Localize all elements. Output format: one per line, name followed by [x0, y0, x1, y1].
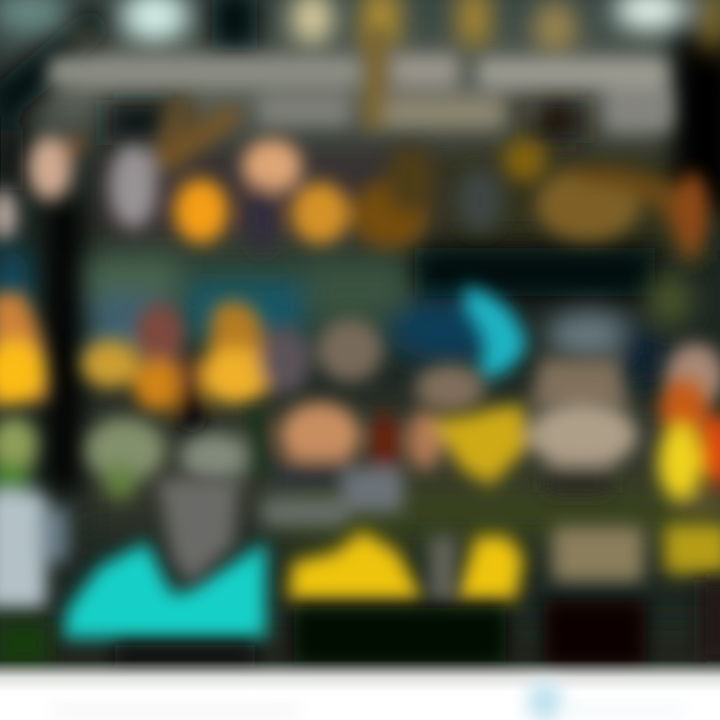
pale left panel	[0, 492, 46, 608]
panel: lower right khaki blocks	[430, 524, 720, 602]
footer text shadow	[50, 704, 300, 718]
green grey block	[85, 418, 165, 482]
pale sky patches	[121, 0, 189, 42]
footer blue mark	[527, 682, 563, 720]
lantern blobs	[145, 95, 200, 175]
tan figure	[529, 401, 637, 469]
chart: yellow mound	[288, 530, 424, 600]
footer strip	[0, 660, 720, 720]
footer right tint	[565, 704, 685, 716]
centre lantern	[206, 301, 266, 360]
chart: yellow peak	[454, 536, 524, 600]
icon: grey wedge	[158, 478, 238, 585]
chart: teal area shape	[62, 542, 266, 638]
panel: warm lantern cluster	[0, 292, 720, 434]
panel: lower icon row	[0, 380, 720, 608]
dark tree trunks and frame	[0, 0, 720, 490]
slate block	[272, 460, 348, 488]
left flame	[0, 292, 48, 408]
left green patch	[0, 417, 38, 473]
dark red pod	[369, 413, 401, 477]
panel: middle band	[0, 248, 692, 382]
panel: lantern row	[0, 95, 709, 260]
heading: blurred title	[48, 30, 673, 132]
orange flame column	[660, 380, 708, 440]
tan block	[280, 402, 360, 468]
icon: yellow heart	[432, 404, 528, 486]
panel: top sky and canopy	[0, 0, 720, 56]
panel: dark lower bands	[0, 580, 720, 667]
icon: teal wave	[465, 285, 527, 378]
cool coloured blocks	[88, 258, 178, 302]
side lantern	[81, 340, 139, 388]
